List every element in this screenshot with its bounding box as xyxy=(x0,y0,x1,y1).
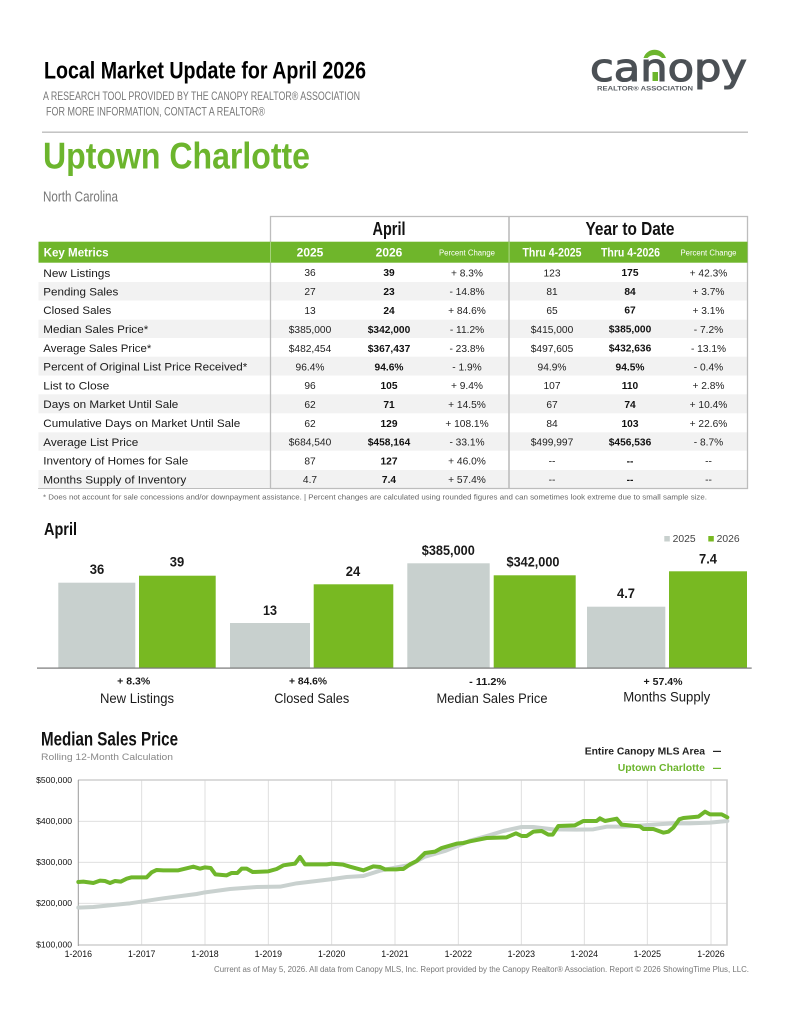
bar group: Months Supply: + 57.4% xyxy=(644,677,683,688)
logo: canopy: REALTOR® ASSOCIATION xyxy=(597,84,693,92)
row: Median Sales Price: Median Sales Price* xyxy=(43,324,149,336)
row: Percent of Original List Price Received: 96.4% xyxy=(296,362,324,373)
row: List to Close: 96 xyxy=(304,381,316,392)
row: Closed Sales: 67 xyxy=(624,306,636,317)
row: New Listings: 175 xyxy=(622,268,639,279)
green header row: Key Metrics xyxy=(44,246,109,260)
row: Days on Market Until Sale: 74 xyxy=(624,400,636,411)
heading: Median Sales Price: Median Sales Price xyxy=(41,730,178,751)
line chart legend xyxy=(585,745,721,774)
row: List to Close: List to Close xyxy=(43,381,109,393)
chart frame xyxy=(78,780,727,945)
subheading: Rolling 12-Month Calculation: Rolling 12-Month Calculation xyxy=(41,752,173,763)
row: Days on Market Until Sale: 67 xyxy=(546,400,558,411)
y axis labels: $100,000 xyxy=(36,940,72,950)
row: Pending Sales: + 3.7% xyxy=(692,287,725,298)
y axis labels xyxy=(36,775,72,950)
row: Average List Price: $456,536 xyxy=(609,438,652,448)
row: Closed Sales: Closed Sales xyxy=(43,305,112,317)
bar group: Closed Sales: Closed Sales xyxy=(274,690,349,706)
row: Inventory of Homes for Sale: 87 xyxy=(304,456,316,467)
row: Average Sales Price: - 23.8% xyxy=(449,344,485,355)
row: Percent of Original List Price Received: 94.5% xyxy=(616,362,644,373)
row: Pending Sales: Pending Sales xyxy=(43,286,119,298)
y axis labels: $500,000 xyxy=(36,775,72,785)
heading: Uptown Charlotte: Uptown Charlotte xyxy=(43,136,310,176)
row: Average List Price: Average List Price xyxy=(43,437,138,449)
bar group: Closed Sales: + 84.6% xyxy=(289,677,327,688)
row: Days on Market Until Sale: + 14.5% xyxy=(448,400,486,411)
row: List to Close xyxy=(43,381,725,393)
x axis labels: 1-2019 xyxy=(255,949,282,959)
row: List to Close: + 2.8% xyxy=(692,381,725,392)
row: Percent of Original List Price Received: 94.6% xyxy=(375,362,403,373)
row: Closed Sales xyxy=(43,305,725,317)
row: Pending Sales xyxy=(43,286,725,298)
row: Pending Sales: 84 xyxy=(624,287,636,298)
x axis labels: 1-2026 xyxy=(697,949,725,959)
row: New Listings: + 8.3% xyxy=(451,268,483,279)
row: Inventory of Homes for Sale: 127 xyxy=(380,456,398,467)
row: Percent of Original List Price Received: Percent of Original List Price Received* xyxy=(43,362,248,374)
row: Days on Market Until Sale: + 10.4% xyxy=(690,400,727,411)
row: Percent of Original List Price Received xyxy=(43,362,723,374)
row: Closed Sales: + 84.6% xyxy=(448,306,486,317)
row: Median Sales Price: $385,000 xyxy=(609,325,652,336)
row: Percent of Original List Price Received: - 0.4% xyxy=(694,362,723,373)
row: Cumulative Days on Market Until Sale xyxy=(43,418,727,430)
subtitle text block: FOR MORE INFORMATION, CONTACT A REALTOR® xyxy=(46,104,265,118)
bar group: Closed Sales: 13 xyxy=(263,602,277,618)
row: Cumulative Days on Market Until Sale: 103 xyxy=(622,419,639,430)
row: Median Sales Price: $385,000 xyxy=(289,325,332,336)
row: Months Supply of Inventory xyxy=(43,474,712,486)
green header row: Thru 4-2025 xyxy=(522,246,582,260)
row: Average List Price: - 33.1% xyxy=(449,438,485,448)
x axis labels: 1-2025 xyxy=(634,949,661,959)
row: New Listings: New Listings xyxy=(43,268,111,280)
bar group: Months Supply: 4.7 xyxy=(617,585,635,601)
row: Months Supply of Inventory: Months Supply of Inventory xyxy=(43,474,187,486)
row: Average List Price: $458,164 xyxy=(368,438,411,448)
row: Inventory of Homes for Sale: Inventory of Homes for Sale xyxy=(43,456,188,468)
line chart legend: Entire Canopy MLS Area xyxy=(585,745,705,757)
bar group: New Listings: 36 xyxy=(90,561,104,577)
logo: canopy: canopy xyxy=(590,46,747,90)
row: Pending Sales: 23 xyxy=(383,287,395,298)
bar group: Months Supply: Months Supply xyxy=(623,689,710,705)
green header row: Percent Change xyxy=(680,248,737,258)
x axis labels: 1-2020 xyxy=(318,949,345,959)
row: New Listings xyxy=(43,268,727,280)
green header row: 2026 xyxy=(376,246,403,260)
row: List to Close: 110 xyxy=(622,381,639,392)
x axis labels: 1-2022 xyxy=(445,949,472,959)
row: New Listings: + 42.3% xyxy=(690,268,727,279)
row: Inventory of Homes for Sale xyxy=(43,456,712,468)
row: Average List Price: - 8.7% xyxy=(694,438,723,448)
panel: key metrics table xyxy=(38,216,748,488)
row: Closed Sales: 13 xyxy=(304,306,316,317)
row: Average List Price xyxy=(43,437,723,449)
footer note: Current as of May 5, 2026. All data from Canopy MLS, Inc. Report provided by the Canopy Realtor® Association. Report © 2026 ShowingTime Plus, LLC. xyxy=(214,965,749,974)
x axis labels: 1-2017 xyxy=(128,949,155,959)
heading: April bar chart: April xyxy=(44,519,77,539)
row: Days on Market Until Sale: 71 xyxy=(383,400,395,411)
row: New Listings: 123 xyxy=(544,268,561,279)
location: North Carolina: North Carolina xyxy=(43,190,119,206)
row: Months Supply of Inventory: -- xyxy=(627,475,633,486)
row: Pending Sales: - 14.8% xyxy=(449,287,485,298)
green header row: Thru 4-2026 xyxy=(601,246,660,260)
row: Days on Market Until Sale: Days on Market Until Sale xyxy=(43,399,178,411)
row: Pending Sales: 27 xyxy=(304,287,316,298)
bar group: Median Sales Price xyxy=(407,542,576,706)
row: Months Supply of Inventory: 7.4 xyxy=(382,475,396,486)
x axis labels: 1-2024 xyxy=(571,949,598,959)
row: Inventory of Homes for Sale: + 46.0% xyxy=(448,456,486,467)
row: List to Close: + 9.4% xyxy=(451,381,483,392)
title: Local Market Update for April 2026 xyxy=(44,58,366,84)
line chart legend: Uptown Charlotte xyxy=(618,762,705,774)
line chart: median sales price xyxy=(36,775,727,959)
y axis labels: $400,000 xyxy=(36,816,72,826)
row: Median Sales Price: - 7.2% xyxy=(694,325,723,336)
row: Inventory of Homes for Sale: -- xyxy=(549,456,555,467)
green header row: 2025 xyxy=(297,246,324,260)
row: Pending Sales: 81 xyxy=(546,287,558,298)
row: Median Sales Price: - 11.2% xyxy=(450,325,484,336)
row: Cumulative Days on Market Until Sale: 84 xyxy=(546,419,558,430)
row: Cumulative Days on Market Until Sale: + 108.1% xyxy=(445,419,489,430)
row: Average Sales Price: - 13.1% xyxy=(691,344,726,355)
row: Average Sales Price: $497,605 xyxy=(531,344,574,355)
table row stripes xyxy=(38,282,748,488)
row: Days on Market Until Sale: 62 xyxy=(304,400,316,411)
bar group: Median Sales Price: - 11.2% xyxy=(469,677,506,688)
column group heading: April: April xyxy=(372,219,406,239)
row: Median Sales Price: $342,000 xyxy=(368,325,411,336)
row: Months Supply of Inventory: -- xyxy=(705,475,712,486)
row: Inventory of Homes for Sale: -- xyxy=(705,456,712,467)
row: Average Sales Price: $432,636 xyxy=(609,344,652,355)
table frame xyxy=(38,216,748,488)
row: Percent of Original List Price Received: 94.9% xyxy=(538,362,566,373)
grid lines xyxy=(78,780,727,945)
bar group: New Listings: + 8.3% xyxy=(117,677,150,688)
line: Uptown Charlotte xyxy=(78,812,727,883)
row: Percent of Original List Price Received: - 1.9% xyxy=(452,362,482,373)
bar chart legend xyxy=(664,534,740,545)
bar group: New Listings: 39 xyxy=(170,554,184,570)
row: Inventory of Homes for Sale: -- xyxy=(627,456,633,467)
row: Months Supply of Inventory: 4.7 xyxy=(303,475,317,486)
bar group: New Listings: New Listings xyxy=(100,690,174,706)
green header row xyxy=(38,242,748,263)
y axis labels: $200,000 xyxy=(36,898,72,908)
bar group: Closed Sales xyxy=(230,563,393,706)
row: Average Sales Price: $367,437 xyxy=(368,344,411,355)
bar group: Closed Sales: 24 xyxy=(346,563,360,579)
row: Months Supply of Inventory: + 57.4% xyxy=(448,475,486,486)
footnote: * Does not account for sale concessions and/or downpayment assistance. | Percent changes are calculated using rounded figures and can sometimes look extreme due to small sample size. xyxy=(43,492,707,502)
x axis labels: 1-2021 xyxy=(381,949,409,959)
bar group: New Listings xyxy=(58,554,216,706)
row: Median Sales Price: $415,000 xyxy=(531,325,574,336)
green header row: Percent Change xyxy=(439,248,496,258)
row: Closed Sales: 65 xyxy=(546,306,558,317)
bar chart legend: 2025 xyxy=(673,534,696,545)
x axis labels: 1-2023 xyxy=(508,949,535,959)
row: Months Supply of Inventory: -- xyxy=(549,475,555,486)
row: Average Sales Price xyxy=(43,343,726,355)
line: Entire Canopy MLS Area xyxy=(78,821,727,908)
row: Cumulative Days on Market Until Sale: 129 xyxy=(380,419,398,430)
bar group: Median Sales Price: $342,000 xyxy=(506,554,560,570)
bar group: Months Supply: 7.4 xyxy=(699,550,717,566)
row: Average Sales Price: Average Sales Price* xyxy=(43,343,152,355)
row: Days on Market Until Sale xyxy=(43,399,727,411)
y axis labels: $300,000 xyxy=(36,857,72,867)
subtitle text block: A RESEARCH TOOL PROVIDED BY THE CANOPY REALTOR® ASSOCIATION xyxy=(43,89,360,103)
row: Cumulative Days on Market Until Sale: Cumulative Days on Market Until Sale xyxy=(43,418,240,430)
column group heading: Year to Date: Year to Date xyxy=(586,219,674,239)
bar group: Median Sales Price: $385,000 xyxy=(422,542,475,558)
bar chart xyxy=(37,542,752,706)
row: Cumulative Days on Market Until Sale: 62 xyxy=(304,419,316,430)
row: Closed Sales: + 3.1% xyxy=(692,306,725,317)
x axis labels: 1-2018 xyxy=(191,949,219,959)
row: New Listings: 36 xyxy=(304,268,316,279)
x axis labels: 1-2016 xyxy=(65,949,92,959)
row: List to Close: 107 xyxy=(544,381,561,392)
bar group: Median Sales Price: Median Sales Price xyxy=(436,690,548,706)
row: List to Close: 105 xyxy=(380,381,398,392)
x axis labels xyxy=(65,949,725,959)
row: New Listings: 39 xyxy=(383,268,395,279)
row: Average List Price: $684,540 xyxy=(289,438,332,448)
bar group: Months Supply xyxy=(587,550,747,705)
row: Median Sales Price xyxy=(43,324,723,336)
row: Average List Price: $499,997 xyxy=(531,438,574,448)
row: Closed Sales: 24 xyxy=(383,306,395,317)
row: Cumulative Days on Market Until Sale: + 22.6% xyxy=(690,419,727,430)
row: Average Sales Price: $482,454 xyxy=(289,344,332,355)
subtitle text block xyxy=(43,89,360,118)
bar chart legend: 2026 xyxy=(717,534,740,545)
